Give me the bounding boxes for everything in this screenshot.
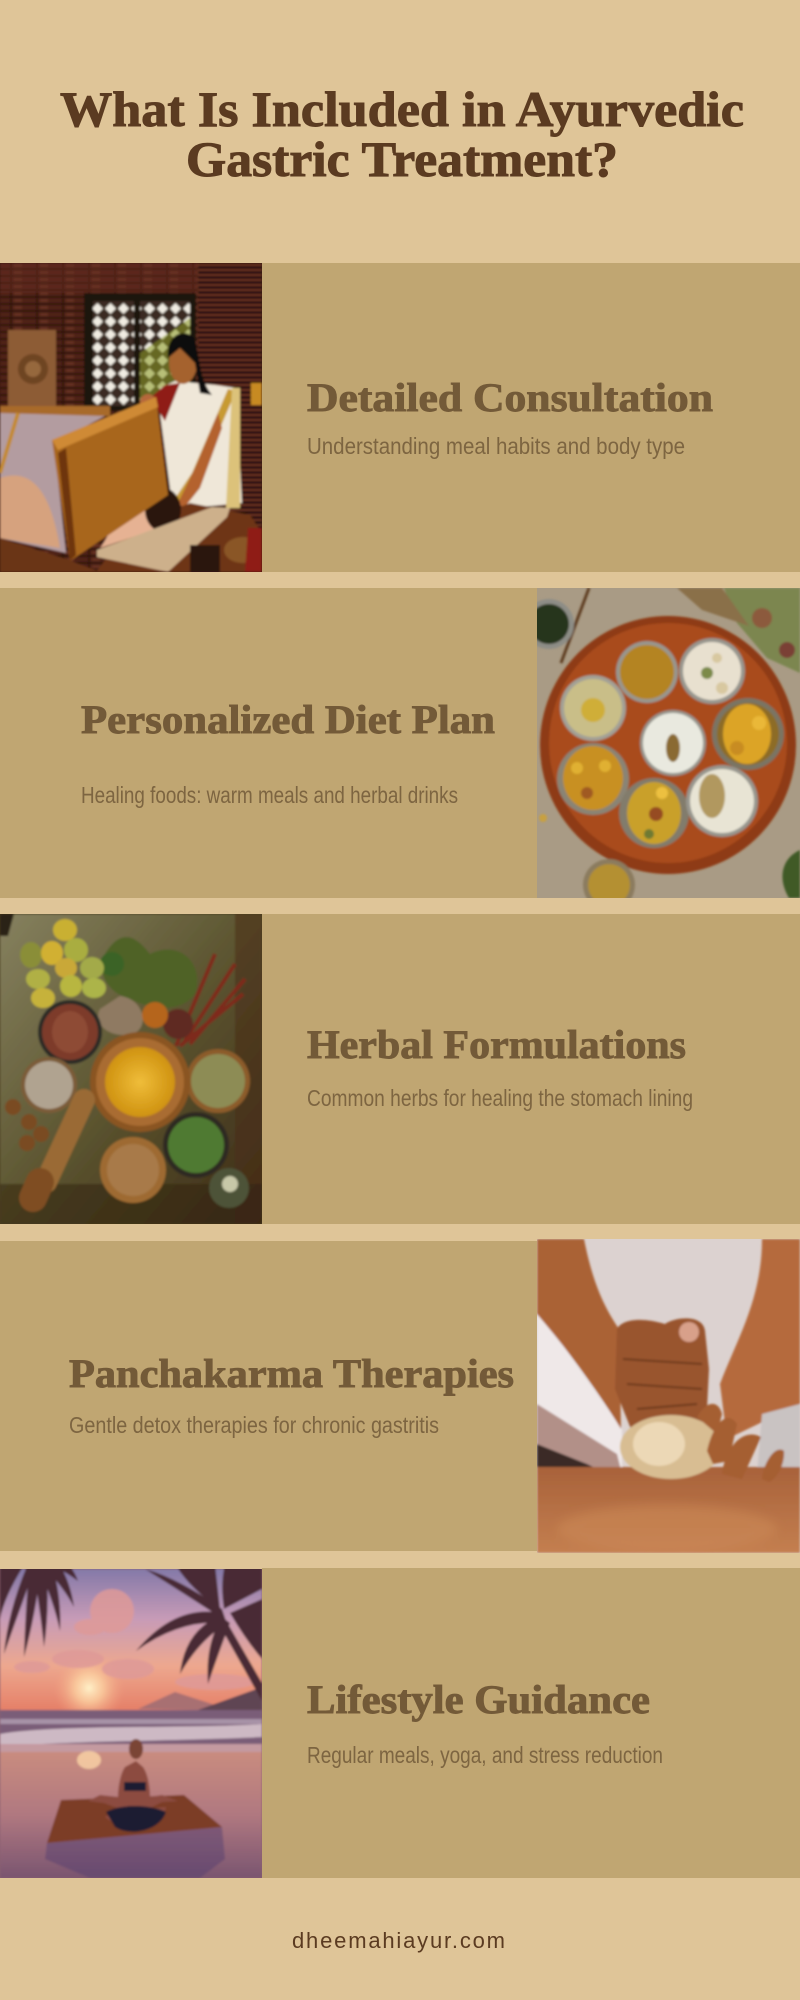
herbs and sticks (98, 937, 245, 1046)
lemons (20, 919, 106, 1008)
food bowls (557, 638, 784, 848)
panel: personalized diet plan (0, 588, 537, 898)
text: lifestyle guidance description: Regular meals, yoga, and stress reduction (307, 1742, 663, 1768)
photo: beach yoga at sunset (0, 1569, 262, 1878)
panel: herbal formulations (262, 914, 800, 1224)
pestle (46, 1100, 84, 1182)
photo: thali plate with bowls (537, 588, 800, 898)
panel: panchakarma therapies (0, 1241, 537, 1551)
text: personalized diet plan description: Healing foods: warm meals and herbal drinks (81, 782, 458, 808)
clouds (14, 1589, 255, 1690)
panel: detailed consultation (262, 263, 800, 572)
heading: lifestyle guidance: Lifestyle Guidance (307, 1677, 650, 1722)
bowls (21, 1000, 250, 1208)
heading: herbal formulations: Herbal Formulations (307, 1022, 686, 1067)
text: panchakarma therapies description: Gentle detox therapies for chronic gastritis (69, 1412, 439, 1438)
footer website: dheemahiayur.com (292, 1928, 505, 1953)
herbal bag (620, 1415, 722, 1479)
fingers (697, 1404, 784, 1482)
text: herbal formulations description: Common herbs for healing the stomach lining (307, 1085, 693, 1111)
heading: personalized diet plan: Personalized Diet Plan (81, 697, 495, 742)
fist (615, 1318, 709, 1434)
mortar (90, 1032, 190, 1132)
woman meditating (47, 1739, 222, 1843)
title: What Is Included in Ayurvedic (60, 81, 744, 137)
text: detailed consultation description: Understanding meal habits and body type (307, 433, 685, 459)
heading: panchakarma therapies: Panchakarma Therapies (69, 1351, 514, 1396)
panel: lifestyle guidance (262, 1568, 800, 1878)
title (60, 81, 744, 187)
heading: detailed consultation: Detailed Consultation (307, 375, 713, 420)
photo: herbal poultice massage (537, 1239, 800, 1553)
walnuts (5, 1099, 49, 1151)
title: Gastric Treatment? (186, 131, 618, 187)
palm trees (0, 1559, 262, 1701)
photo: steam therapy room (0, 263, 262, 572)
photo: herbs and mortar (0, 914, 262, 1224)
